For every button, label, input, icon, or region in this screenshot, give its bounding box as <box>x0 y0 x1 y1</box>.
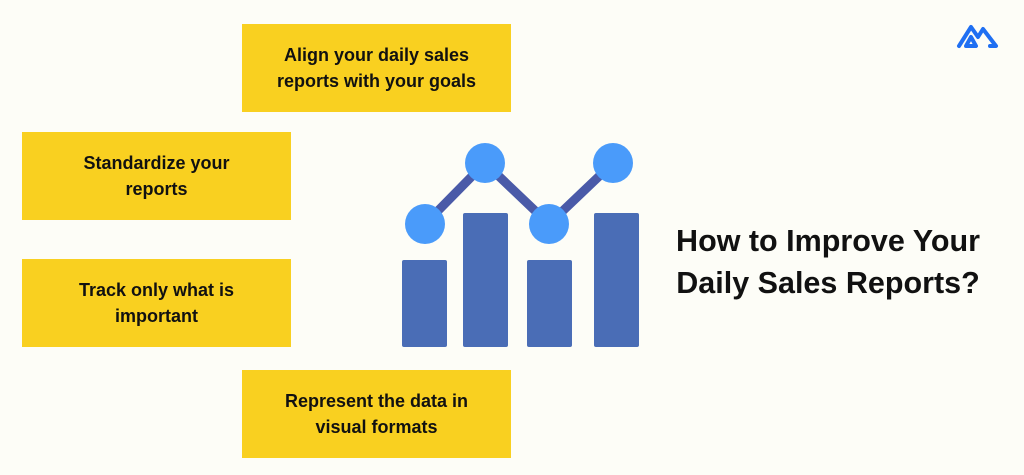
box: track important: important <box>115 306 198 326</box>
box: track important <box>22 259 291 347</box>
box: visual formats <box>242 370 511 458</box>
box: align reports with goals: Align your daily sales <box>284 45 469 65</box>
icon: logo <box>956 24 998 48</box>
box: track important: Track only what is <box>79 280 234 300</box>
box: align reports with goals: reports with your goals <box>277 71 476 91</box>
box: standardize: Standardize your <box>83 153 230 173</box>
title: How to Improve Your <box>676 224 980 258</box>
title: Daily Sales Reports? <box>676 266 980 300</box>
box: visual formats: Represent the data in <box>285 391 468 411</box>
box: align reports with goals <box>242 24 511 112</box>
box: standardize <box>22 132 291 220</box>
box: standardize: reports <box>125 179 188 199</box>
box: visual formats: visual formats <box>315 417 438 437</box>
title <box>676 224 980 300</box>
